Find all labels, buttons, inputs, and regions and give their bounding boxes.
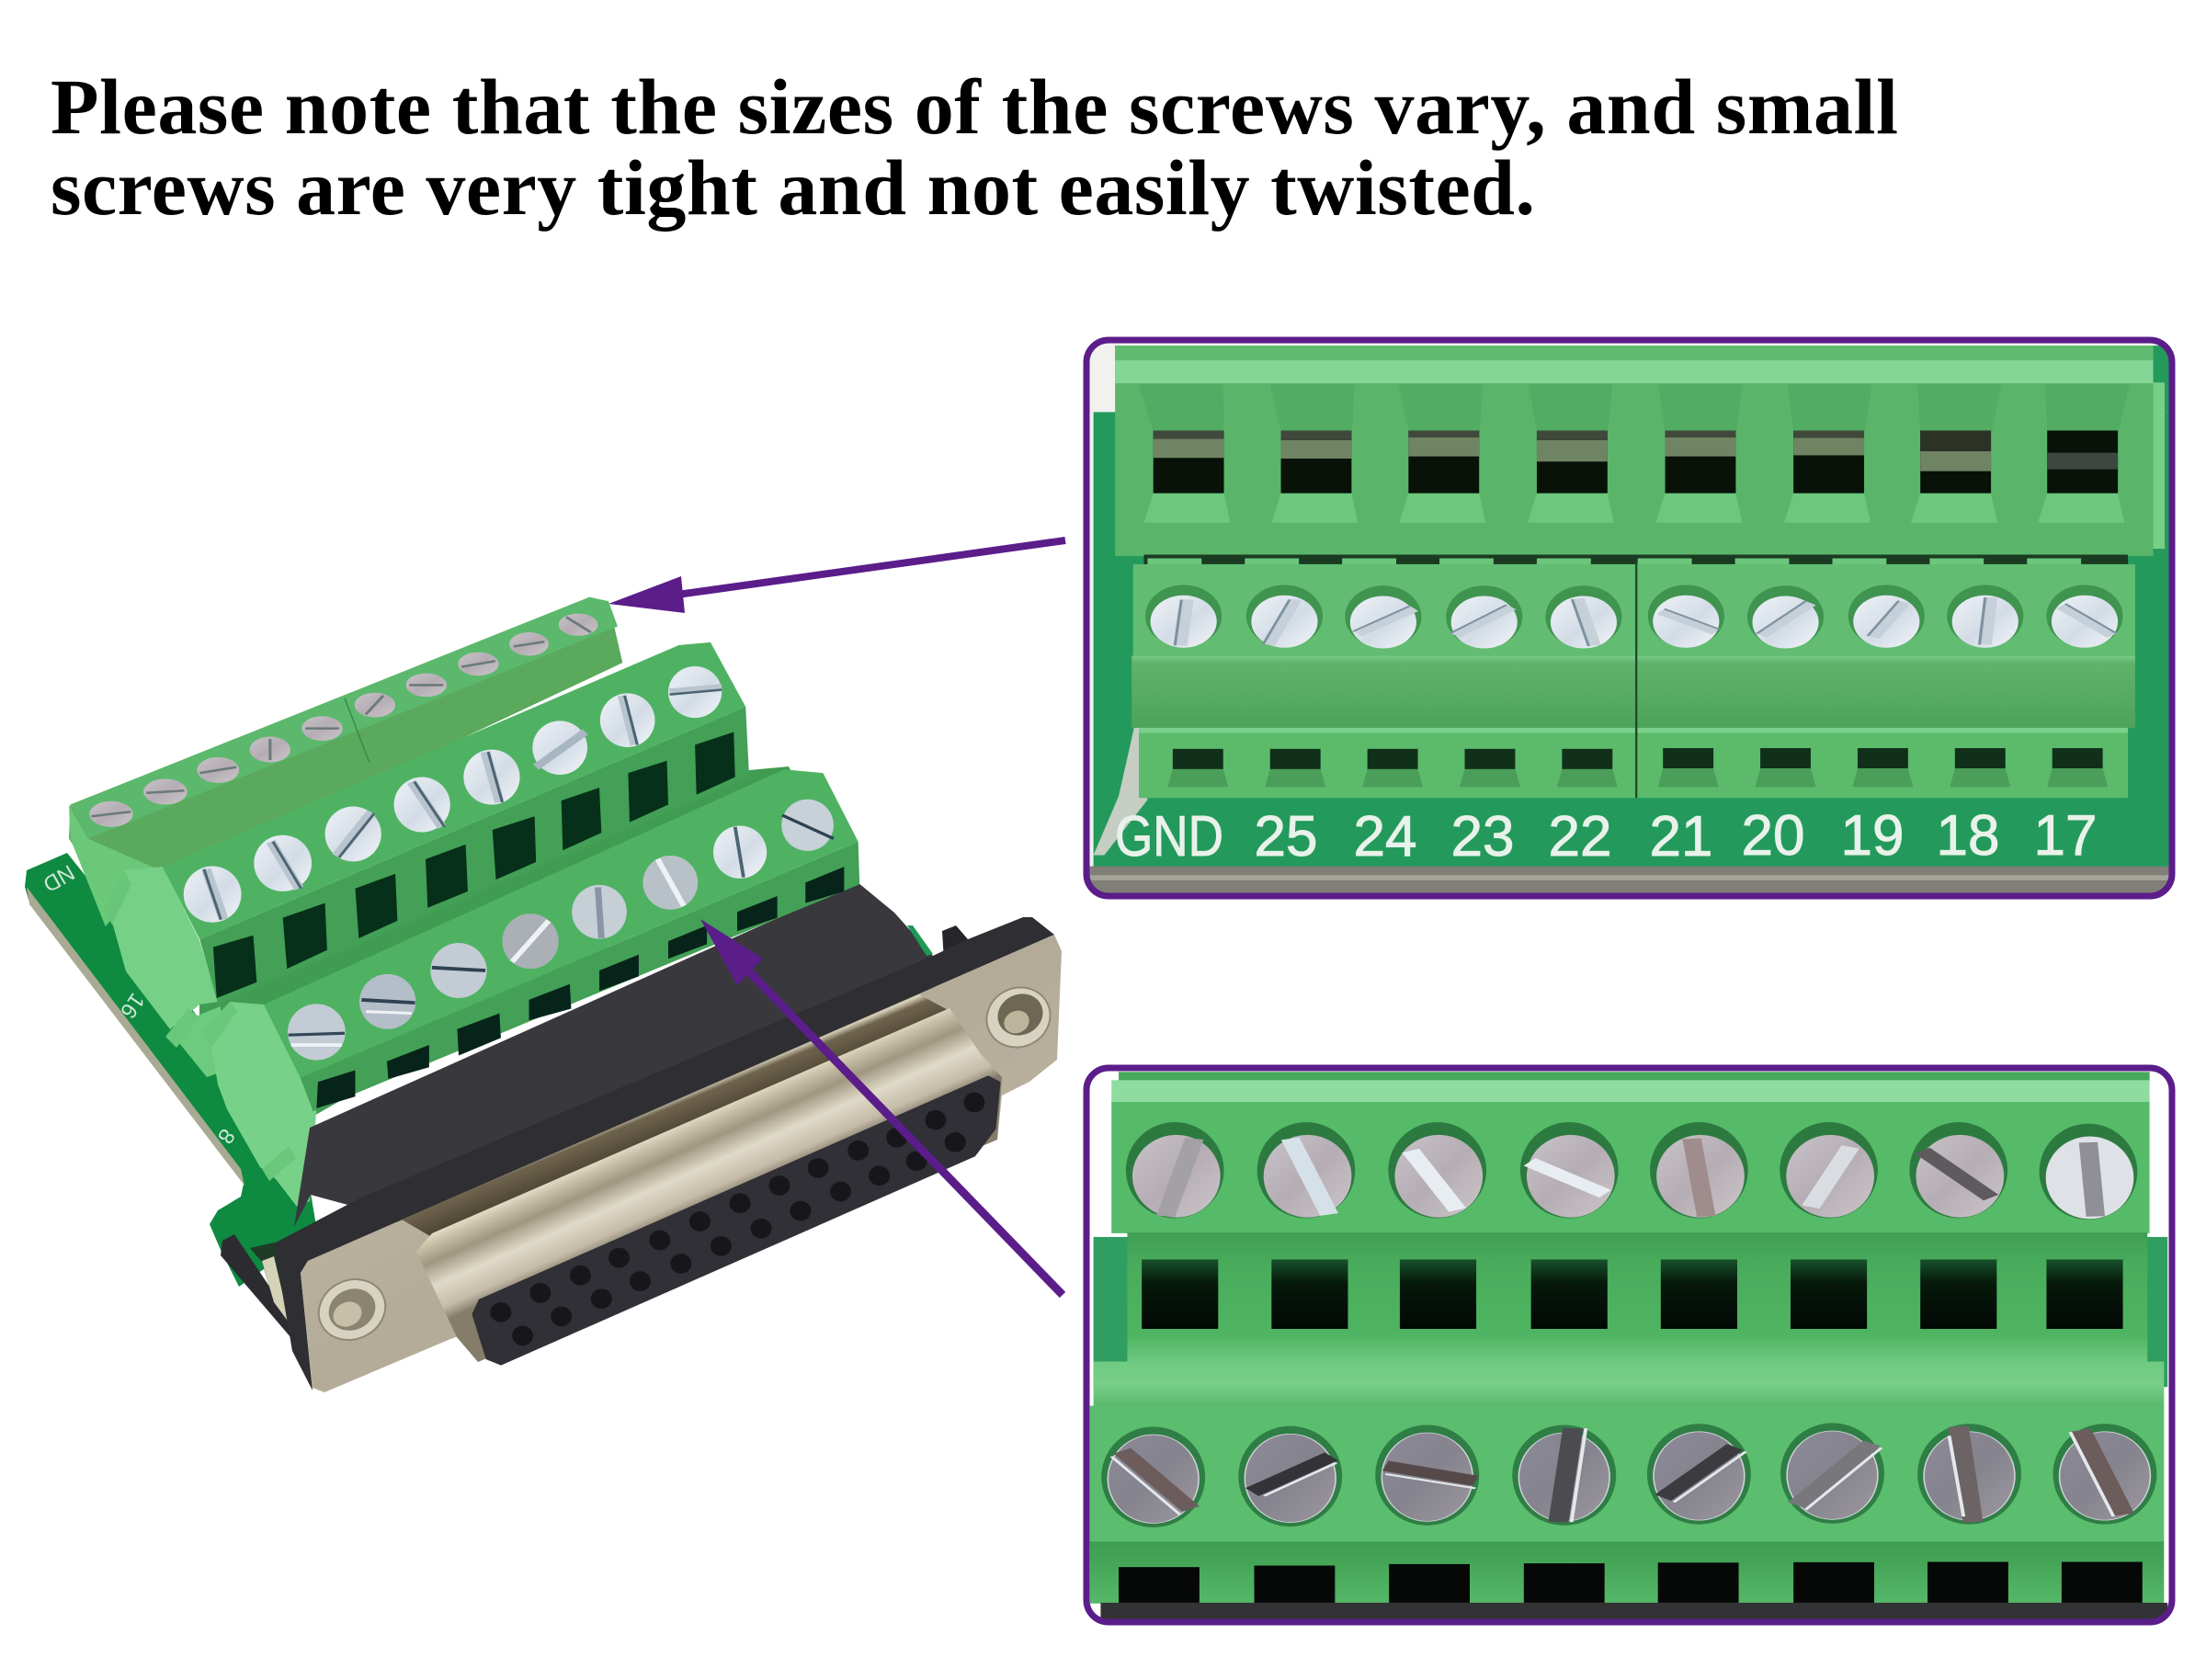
pin labels printed on board: 21: [1650, 805, 1712, 868]
rear terminal block with small screws: [69, 597, 622, 926]
screw recess shadows: [1145, 585, 2123, 648]
end face of front terminal block: [200, 1002, 317, 1207]
pin labels printed on board: 17: [2034, 804, 2097, 868]
pin labels printed on board: 19: [1841, 804, 1904, 868]
title: [51, 62, 1898, 232]
shadow fill between the terminal blocks: [199, 766, 818, 1117]
upper terminal block with wire openings: [1115, 346, 2165, 556]
upper terminal block with screws: [1111, 1072, 2150, 1362]
title: Please note that the sizes of the screws vary, and small: [51, 62, 1898, 151]
circuit board: [25, 853, 317, 1287]
arrow: bottom panel to front terminal block: [700, 919, 1063, 1295]
pin labels printed on board: 18: [1937, 804, 1999, 868]
board behind blocks: [1094, 1237, 2167, 1387]
pin labels printed on board: 20: [1742, 804, 1804, 868]
middle terminal block: [163, 642, 749, 1004]
circuit board: 16: [115, 988, 149, 1023]
pin labels printed on board: 24: [1354, 805, 1416, 868]
black connector housing: [294, 882, 933, 1232]
circuit board with silkscreen: [1086, 346, 2182, 900]
circuit board: ND: [39, 859, 79, 897]
title: screws are very tight and not easily twisted.: [51, 143, 1535, 232]
lower terminal block body: [1131, 554, 2135, 798]
frame: bottom close-up: [1086, 1068, 2172, 1622]
pin labels printed on board: 22: [1549, 805, 1611, 868]
arrow: top panel to rear terminal block: [608, 540, 1065, 613]
pin labels printed on board: 23: [1451, 805, 1514, 868]
connector metal flange and shell: [221, 917, 1062, 1392]
front terminal block: [264, 769, 859, 1111]
frame: top close-up: [1086, 340, 2172, 896]
panel: top close-up, small screws: [1084, 337, 2182, 900]
product photo: D-sub 25 breakout board: [25, 597, 1062, 1392]
pin labels printed on board: [1117, 814, 2095, 857]
circuit board: 8: [212, 1124, 240, 1148]
pin labels printed on board: 25: [1255, 805, 1317, 868]
panel: bottom close-up, large screws: [1084, 1065, 2175, 1625]
end face of middle terminal block: [103, 867, 225, 1077]
screws, ten small heads: [1151, 596, 2118, 649]
lower terminal block with screws: [1090, 1361, 2167, 1621]
pin labels printed on board: GND: [1115, 805, 1223, 868]
